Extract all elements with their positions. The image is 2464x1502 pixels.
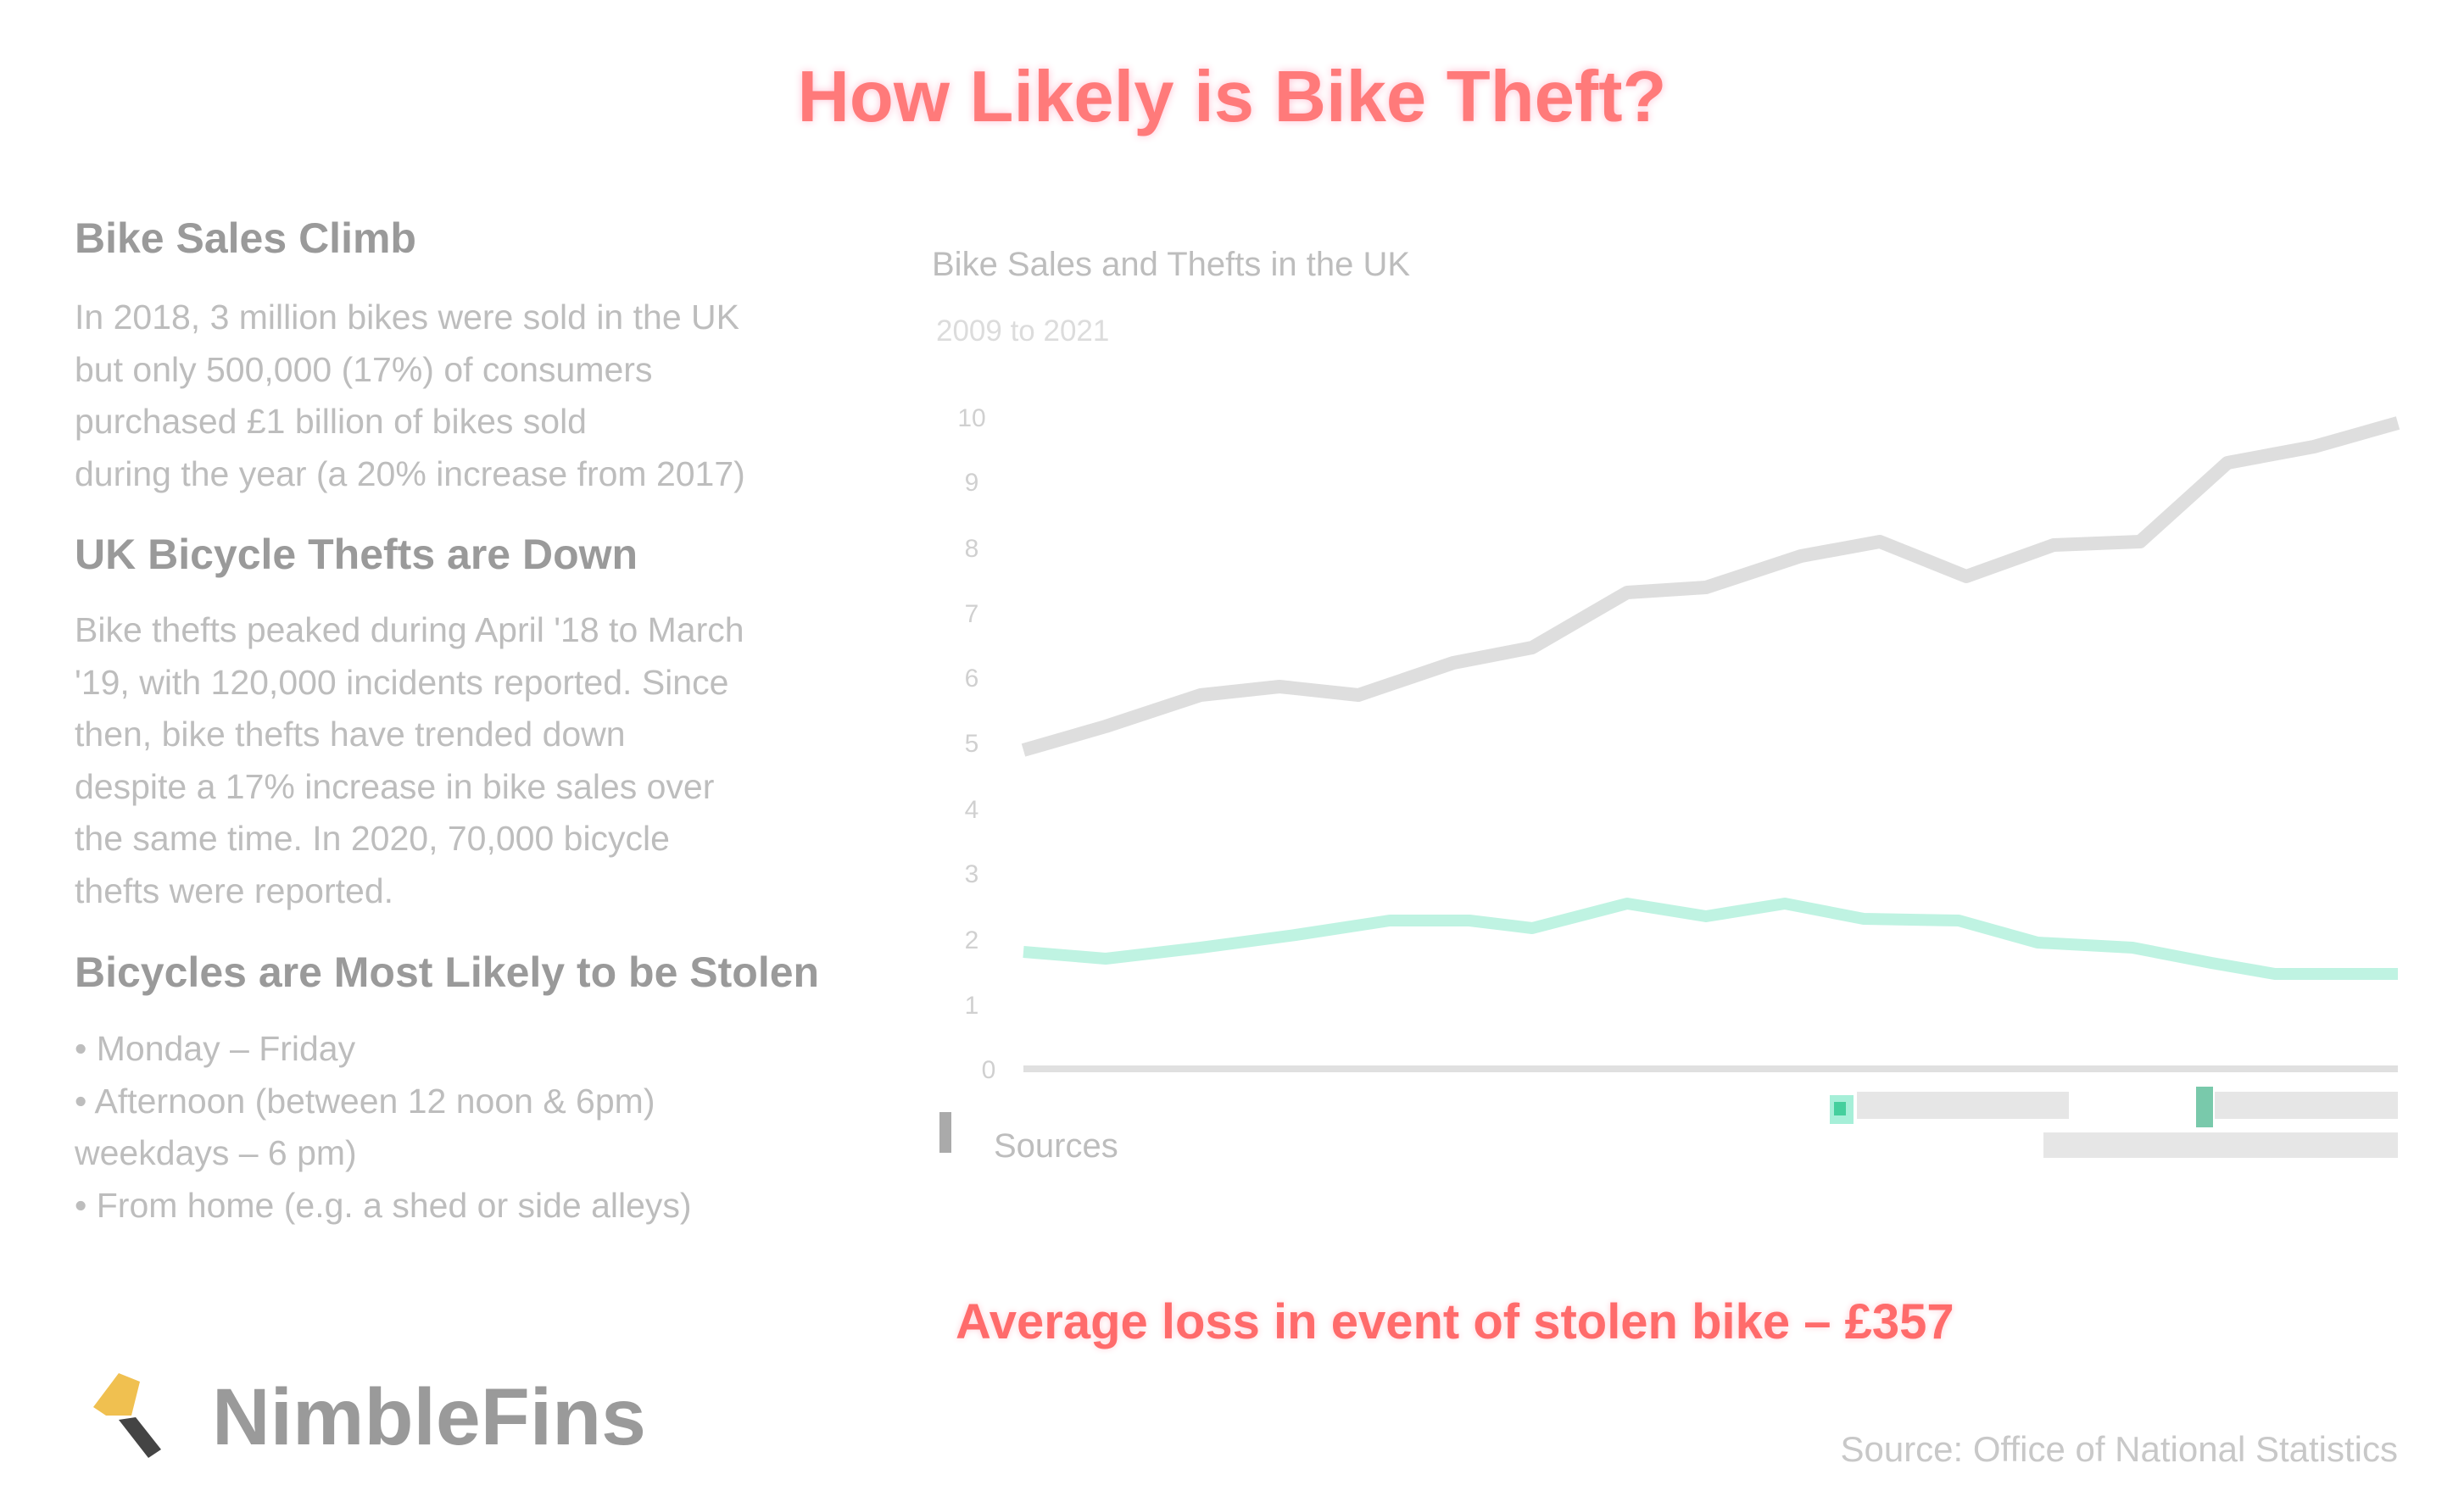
panel: left text <box>75 214 819 1224</box>
text: bike sales: In 2018, 3 million bikes were sold in the UK <box>75 298 739 337</box>
text: thefts down: Bike thefts peaked during April '18 to March <box>75 610 744 649</box>
text: bike sales: but only 500,000 (17%) of consumers <box>75 349 652 388</box>
credits: Sources <box>994 1127 1118 1165</box>
y axis labels: 6 <box>965 665 978 693</box>
chart <box>932 246 2400 1165</box>
line: bike sales <box>1023 423 2398 750</box>
text: thefts down: thefts were reported. <box>75 871 393 910</box>
heading: thefts down: UK Bicycle Thefts are Down <box>75 531 638 578</box>
logo <box>93 1372 646 1462</box>
list: most likely: weekdays – 6 pm) <box>75 1133 357 1172</box>
text: bike sales <box>75 298 745 493</box>
y axis labels <box>957 404 995 1084</box>
list: most likely: • Afternoon (between 12 noon & 6pm) <box>75 1082 655 1121</box>
icon: logo <box>93 1373 161 1458</box>
y axis labels: 0 <box>982 1056 995 1084</box>
heading: bike sales: Bike Sales Climb <box>75 214 416 262</box>
callout: average loss: Average loss in event of stolen bike – £357 <box>956 1294 1954 1349</box>
y axis labels: 4 <box>965 796 978 824</box>
text: thefts down: the same time. In 2020, 70,000 bicycle <box>75 819 670 858</box>
y axis labels: 9 <box>965 469 978 497</box>
text: logo: NimbleFins <box>212 1372 646 1462</box>
y axis labels: 1 <box>965 992 978 1020</box>
heading: most likely: Bicycles are Most Likely to be Stolen <box>75 948 819 996</box>
list: most likely: • Monday – Friday <box>75 1029 355 1068</box>
line: bike thefts <box>1023 904 2398 974</box>
text: thefts down: '19, with 120,000 incidents reported. Since <box>75 663 728 702</box>
title: How Likely is Bike Theft? <box>798 57 1666 137</box>
y axis labels: 7 <box>965 600 978 628</box>
list: most likely <box>75 1029 692 1224</box>
y axis labels: 2 <box>965 926 978 954</box>
source: Source: Office of National Statistics <box>1840 1429 2398 1469</box>
y axis labels: 10 <box>957 404 986 432</box>
text: thefts down: then, bike thefts have trended down <box>75 715 626 754</box>
y axis labels: 3 <box>965 860 978 888</box>
legend <box>1830 1087 2398 1158</box>
list: most likely: • From home (e.g. a shed or side alleys) <box>75 1185 692 1224</box>
text: thefts down <box>75 610 744 910</box>
text: bike sales: purchased £1 billion of bikes sold <box>75 402 587 441</box>
text: bike sales: during the year (a 20% increase from 2017) <box>75 454 745 493</box>
y axis labels: 8 <box>965 535 978 563</box>
text: thefts down: despite a 17% increase in bike sales over <box>75 766 714 805</box>
chart title: Bike Sales and Thefts in the UK <box>932 246 1410 283</box>
y axis labels: 5 <box>965 730 978 758</box>
credits <box>939 1112 1118 1165</box>
chart subtitle: 2009 to 2021 <box>936 314 1109 348</box>
